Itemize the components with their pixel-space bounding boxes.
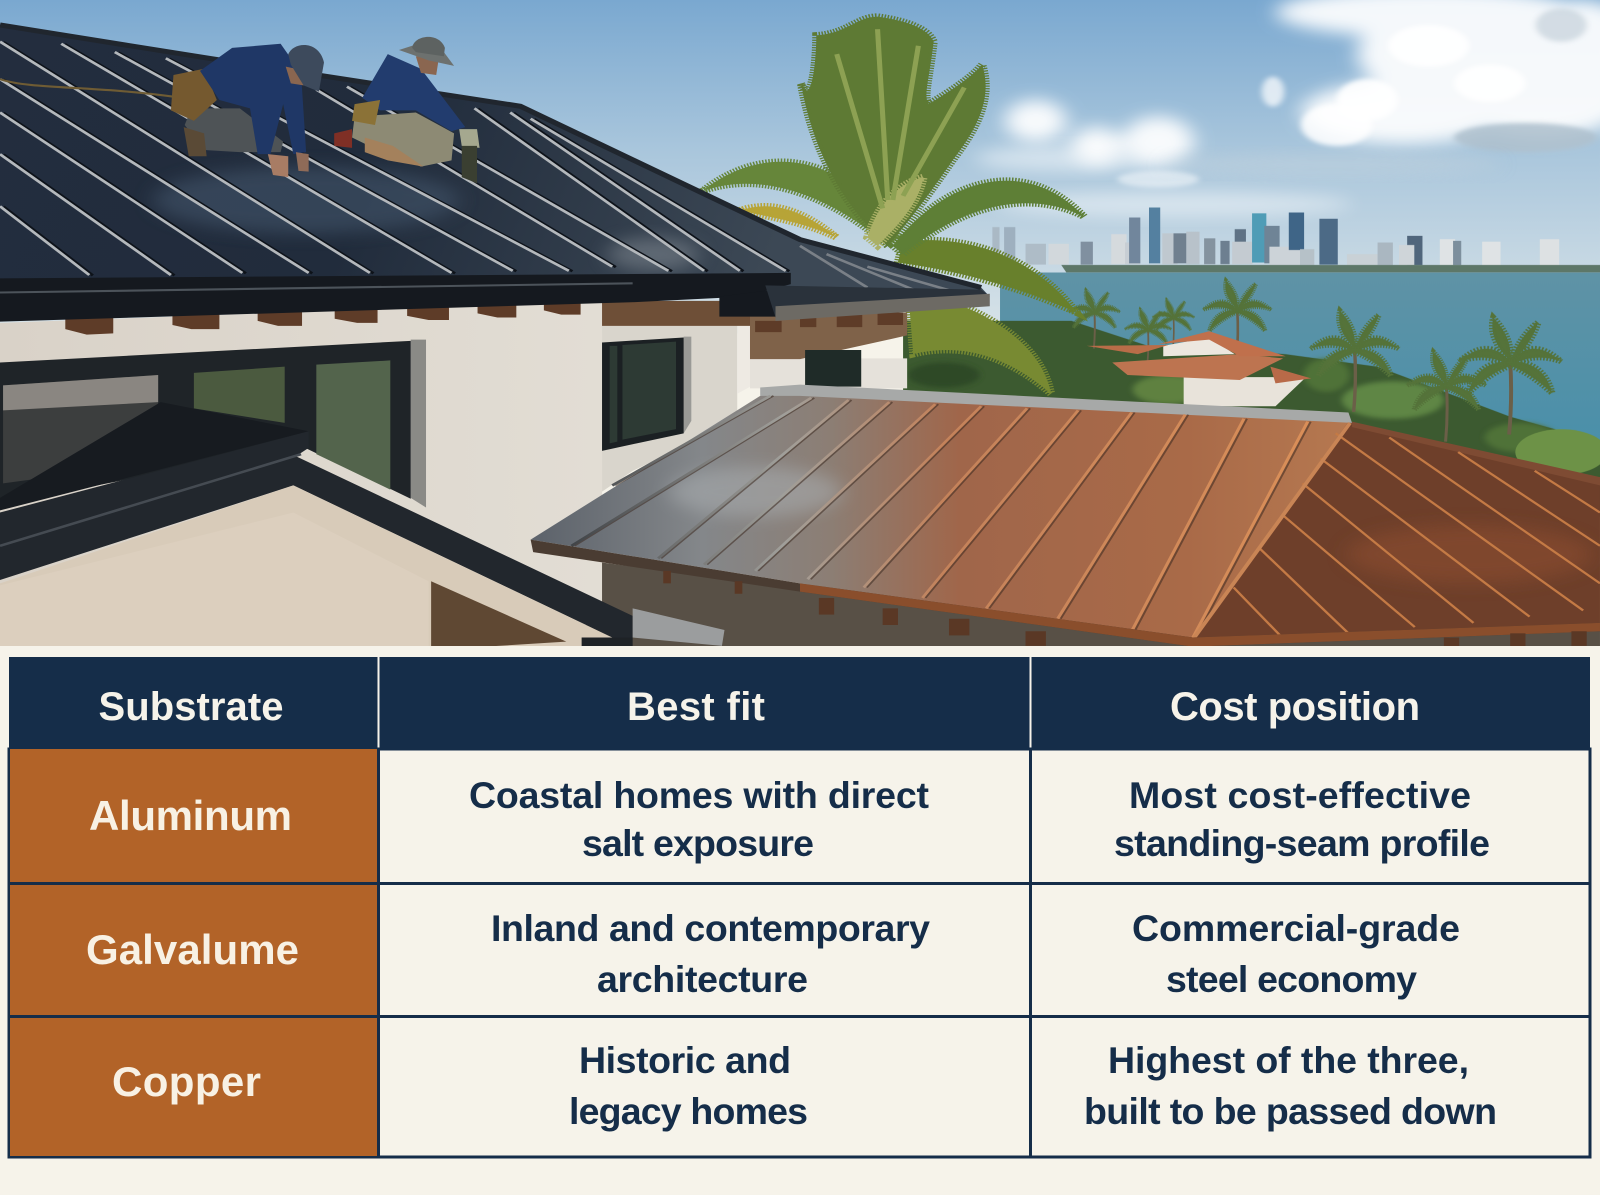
substrate cell: Copper (10, 1018, 377, 1156)
large folding window (0, 340, 426, 508)
cost position: Copper: built to be passed down (1084, 1090, 1497, 1132)
shaded wall under copper roof (536, 554, 1600, 650)
best fit: Aluminum: salt exposure (582, 822, 814, 864)
cost position: Galvalume: steel economy (1166, 958, 1417, 1000)
column heading: Substrate: Substrate (98, 685, 284, 729)
roofer on left (0, 44, 324, 177)
rafter tails (65, 302, 903, 335)
right plane seams (1234, 433, 1600, 638)
distant palm trees (1069, 281, 1561, 442)
substrate cell: Aluminum (10, 749, 377, 882)
stucco wall and windows (0, 301, 907, 625)
far shoreline (1061, 265, 1600, 273)
cost position: Aluminum: standing-seam profile (1114, 822, 1490, 864)
left plane seams (571, 396, 1308, 638)
substrate cell: Aluminum: Aluminum (89, 792, 292, 839)
roofer on right (334, 37, 480, 183)
cost position: Aluminum (1114, 774, 1490, 864)
cost position: Galvalume (1132, 907, 1460, 1000)
best fit: Galvalume: Inland and contemporary (491, 907, 930, 949)
best fit: Copper (569, 1039, 808, 1132)
photo: roofers on metal roofs with coastal skyline (0, 0, 1600, 646)
substrate cell: Galvalume: Galvalume (86, 926, 299, 973)
substrate cell: Copper: Copper (112, 1058, 261, 1105)
right roof plane (1193, 422, 1600, 642)
best fit: Aluminum (469, 774, 930, 864)
copper eave fascia (531, 540, 1600, 647)
roof eave and gutter (0, 273, 990, 322)
best fit: Galvalume (491, 907, 930, 1000)
cost position: Aluminum: Most cost-effective (1129, 774, 1471, 816)
column heading: Best fit: Best fit (627, 685, 765, 729)
cost position: Copper (1084, 1039, 1497, 1132)
city skyline (992, 208, 1559, 266)
left roof plane, steel fading to copper (531, 385, 1352, 640)
best fit: Copper: Historic and (579, 1039, 791, 1081)
best fit: Aluminum: Coastal homes with direct (469, 774, 930, 816)
scene scaled to photo coordinates (0, 0, 1600, 650)
header row (9, 657, 1590, 749)
main dark standing-seam roof (0, 25, 990, 297)
bay water (1000, 273, 1600, 448)
distant villa with terracotta roof (1087, 331, 1311, 406)
best fit: Galvalume: architecture (597, 958, 808, 1000)
column heading: Cost position: Cost position (1170, 685, 1420, 729)
copper roof (531, 385, 1600, 648)
roof seam shadows (4, 42, 789, 275)
side window (602, 337, 691, 451)
left plane seam shadows (574, 396, 1311, 638)
ridge cap (760, 385, 1352, 423)
clouds (974, 0, 1600, 217)
large foreground palm (702, 17, 1084, 394)
eave rafter tails (663, 571, 1587, 648)
roof seams (0, 42, 954, 292)
cost position: Copper: Highest of the three, (1108, 1039, 1469, 1081)
cost position: Galvalume: Commercial-grade (1132, 907, 1460, 949)
substrate cell: Galvalume (10, 885, 377, 1015)
grid lines (9, 749, 1590, 1157)
sky (0, 0, 1600, 333)
table body (9, 749, 1590, 1157)
best fit: Copper: legacy homes (569, 1090, 808, 1132)
upper window at right (805, 350, 861, 387)
lower gable roof with gutter (0, 402, 724, 650)
mid-ground trees (903, 321, 1600, 517)
